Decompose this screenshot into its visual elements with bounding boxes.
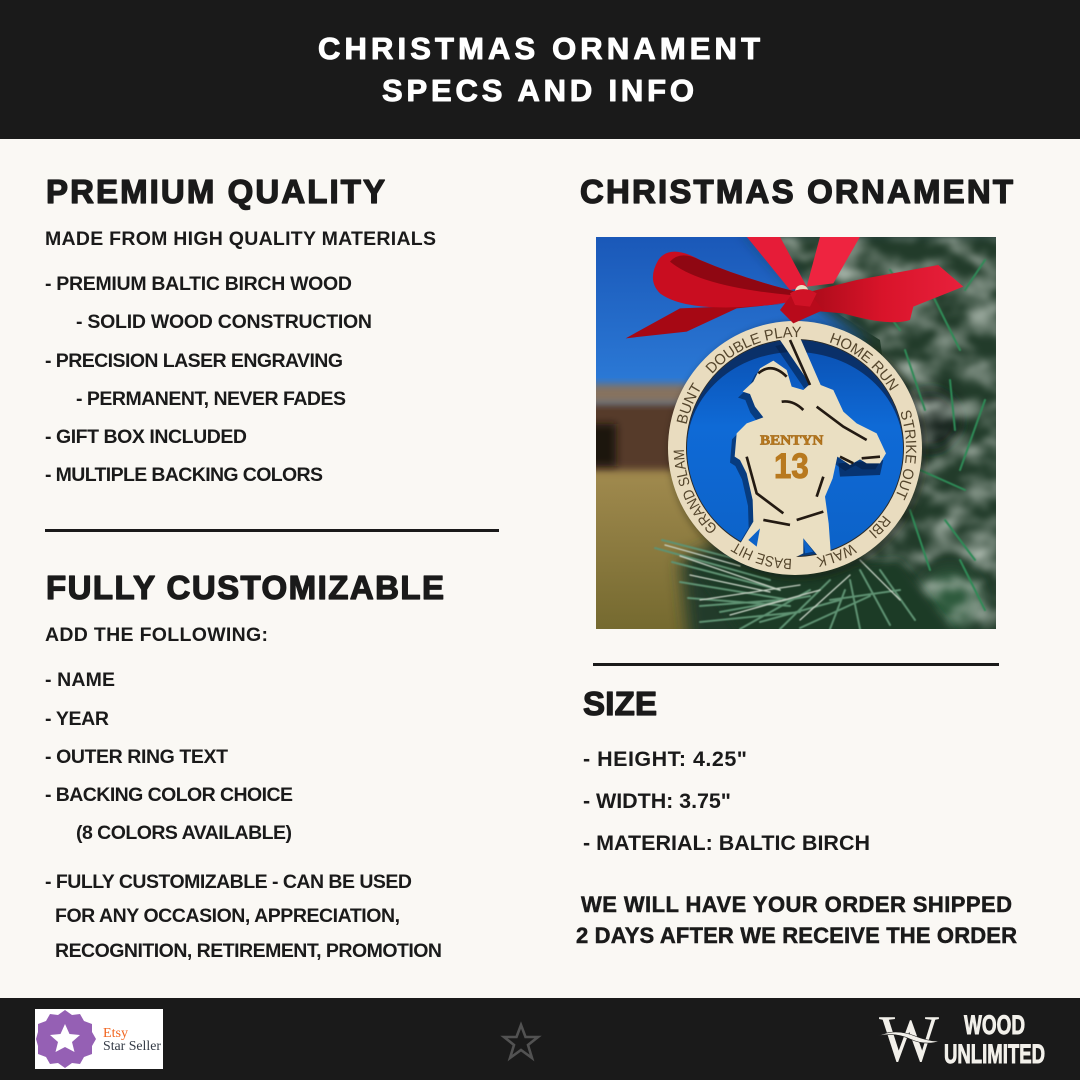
list: customization options: - OUTER RING TEXT <box>45 746 228 768</box>
ornament <box>668 321 922 575</box>
list: quality features: - GIFT BOX INCLUDED <box>45 426 247 448</box>
heading: fully customizable: FULLY CUSTOMIZABLE <box>46 569 444 606</box>
ring engraved text: BUNT <box>676 382 700 424</box>
red ribbon bow <box>626 237 963 338</box>
callout: shipping note: 2 DAYS AFTER WE RECEIVE THE ORDER <box>576 923 1017 948</box>
wood outer ring <box>668 321 922 575</box>
heading: christmas ornament: CHRISTMAS ORNAMENT <box>580 173 1013 210</box>
footer band <box>0 998 1080 1080</box>
text block: occasions: RECOGNITION, RETIREMENT, PROMOTION <box>55 940 442 962</box>
ring engraved text: STRIKE OUT <box>896 410 916 500</box>
callout: shipping note <box>576 892 1017 948</box>
logo wordmark <box>944 1010 1045 1069</box>
list: customization options: - NAME <box>45 669 115 691</box>
ring engraved text: HOME RUN <box>830 332 899 391</box>
ring engraved text: GRAND SLAM <box>674 450 716 533</box>
panel: premium quality <box>45 173 436 486</box>
title <box>318 31 760 108</box>
list: quality features: - PERMANENT, NEVER FADES <box>76 388 346 410</box>
title: SPECS AND INFO <box>382 73 694 108</box>
icon: outlined star <box>504 1025 538 1058</box>
ring engraved text: BASE HIT <box>730 543 791 570</box>
text: etsy star seller: Etsy <box>103 1026 128 1041</box>
ring engraved text <box>674 326 916 570</box>
list: quality features: - PRECISION LASER ENGRAVING <box>45 350 343 372</box>
batter silhouette <box>735 336 886 567</box>
list: customization options: - BACKING COLOR CHOICE <box>45 784 293 806</box>
logo mark: W: W <box>879 1002 940 1076</box>
list: quality features: - MULTIPLE BACKING COLORS <box>45 464 323 486</box>
text: etsy star seller: Star Seller <box>103 1039 161 1054</box>
logo: wood unlimited <box>878 1002 1045 1076</box>
logo wordmark: WOOD <box>964 1010 1025 1040</box>
ornament shadow <box>670 323 926 579</box>
callout: shipping note: WE WILL HAVE YOUR ORDER SHIPPED <box>581 892 1012 917</box>
badge: etsy star seller <box>35 1009 163 1069</box>
list: customization options <box>45 669 293 844</box>
text block: occasions: - FULLY CUSTOMIZABLE - CAN BE USED <box>45 871 412 893</box>
jersey name: BENTYN <box>760 434 823 449</box>
ring engraved text: WALK <box>816 544 858 567</box>
list: dimensions: - MATERIAL: BALTIC BIRCH <box>583 831 870 855</box>
pine tree foliage <box>654 237 996 629</box>
list: dimensions: - HEIGHT: 4.25" <box>583 747 747 771</box>
backing inner shadow <box>687 340 903 448</box>
text block: materials intro: MADE FROM HIGH QUALITY MATERIALS <box>45 228 436 250</box>
title: CHRISTMAS ORNAMENT <box>318 31 760 66</box>
ground and fence background <box>596 378 722 629</box>
panel: size <box>583 685 870 855</box>
silhouette cast shadow <box>730 342 883 569</box>
list: quality features <box>45 273 372 486</box>
header band with title <box>0 0 1080 139</box>
photo: baseball ornament on pine tree <box>596 237 996 629</box>
text block: occasions <box>45 871 442 962</box>
list: dimensions: - WIDTH: 3.75" <box>583 789 731 813</box>
ring engraved text: RBI <box>869 516 891 538</box>
list: customization options: (8 COLORS AVAILABLE) <box>76 822 292 844</box>
panel: fully customizable <box>45 569 444 962</box>
heading: premium quality: PREMIUM QUALITY <box>46 173 385 210</box>
list: dimensions <box>583 747 870 855</box>
jersey number: 13 <box>774 447 809 486</box>
icon: purple scalloped star badge <box>36 1010 96 1068</box>
list: quality features: - SOLID WOOD CONSTRUCTION <box>76 311 372 333</box>
list: customization options: - YEAR <box>45 708 109 730</box>
text: etsy star seller <box>103 1026 161 1054</box>
list: quality features: - PREMIUM BALTIC BIRCH WOOD <box>45 273 352 295</box>
ring engraved text: DOUBLE PLAY <box>705 326 802 374</box>
heading: size: SIZE <box>583 685 657 722</box>
blue backing disc <box>687 340 903 556</box>
text block: customization intro: ADD THE FOLLOWING: <box>45 624 268 646</box>
text block: occasions: FOR ANY OCCASION, APPRECIATION, <box>55 905 400 927</box>
